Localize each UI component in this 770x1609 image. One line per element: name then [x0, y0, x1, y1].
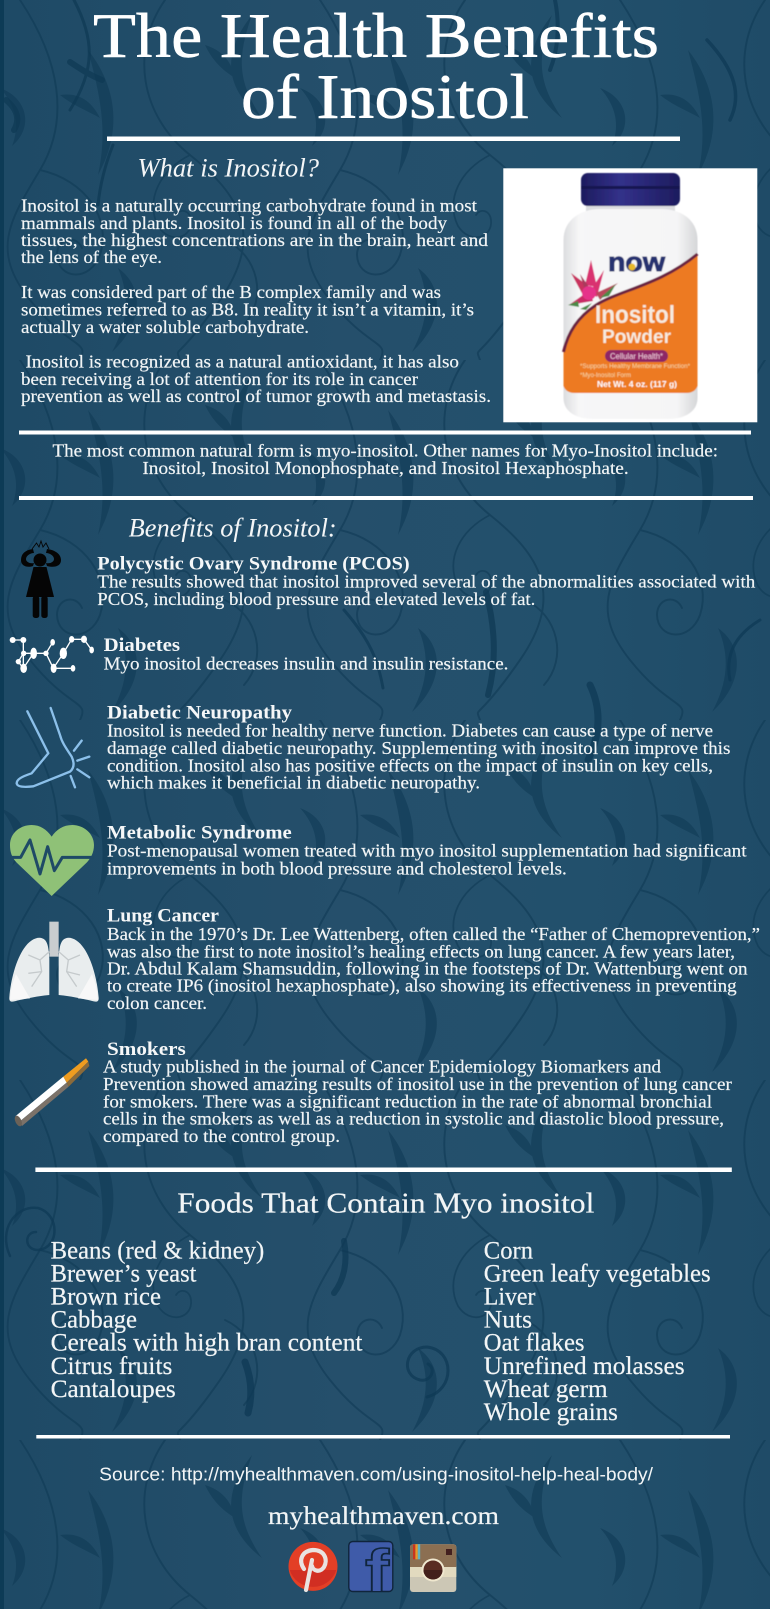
text block: lung cancer: colon cancer.: [107, 993, 207, 1013]
panel: diabetes: [10, 636, 508, 673]
text block: antioxidant: prevention as well as control of tumor growth and metastasis.: [21, 386, 491, 406]
text block: smokers: A study published in the journal of Cancer Epidemiology Biomarkers and: [103, 1057, 661, 1077]
list: foods right column: Oat flakes: [484, 1330, 584, 1357]
text block: diabetic neuropathy: which makes it beneficial in diabetic neuropathy.: [107, 773, 480, 793]
text block: diabetic neuropathy: Inositol is needed for healthy nerve function. Diabetes can cause a type of nerve: [107, 721, 713, 741]
product photo: inositol powder bottle: Net Wt. 4 oz. (117 g): [597, 379, 677, 389]
title: of Inositol: [241, 62, 529, 132]
list: foods left column: [51, 1237, 363, 1403]
text block: pcos: PCOS, including blood pressure and elevated levels of fat.: [97, 589, 535, 609]
product photo: inositol powder bottle: *Supports Healthy Membrane Function*: [580, 363, 690, 370]
title divider: [107, 136, 680, 141]
text block: pcos: The results showed that inositol improved several of the abnormalities associated with: [97, 571, 755, 591]
text block: smokers: cells in the smokers as well as a reduction in systolic and diastolic blood pressure,: [103, 1109, 724, 1129]
heading: smokers: Smokers: [107, 1040, 186, 1060]
text block: smokers: [103, 1057, 732, 1146]
product photo: inositol powder bottle: now: [608, 247, 666, 277]
list: foods right column: Whole grains: [484, 1399, 618, 1426]
text block: b complex: actually a water soluble carbohydrate.: [21, 317, 309, 337]
list: foods right column: Nuts: [484, 1307, 532, 1334]
icon: foot with pain rays: [17, 708, 89, 787]
icon: lungs: [9, 922, 99, 1002]
product photo: inositol powder bottle: Powder: [602, 327, 672, 348]
heading: metabolic syndrome: Metabolic Syndrome: [107, 823, 292, 843]
list: foods right column: Green leafy vegetables: [484, 1261, 711, 1288]
panel: diabetic neuropathy: [17, 703, 730, 793]
text block: natural form: The most common natural form is myo-inositol. Other names for Myo-Inositol include:: [52, 441, 718, 461]
text block: metabolic syndrome: Post-menopausal women treated with myo inositol supplementation had significant: [107, 841, 747, 861]
list: foods right column: Liver: [484, 1284, 536, 1311]
panel: smokers: [13, 1040, 732, 1146]
list: foods left column: Beans (red & kidney): [51, 1237, 264, 1264]
icon: pinterest: [288, 1542, 338, 1591]
text block: antioxidant: [21, 352, 491, 406]
icon: facebook: f: [365, 1538, 390, 1605]
list: foods left column: Brown rice: [51, 1284, 161, 1311]
text block: definition: tissues, the highest concentrations are in the brain, heart and: [21, 230, 488, 250]
list: foods right column: Wheat germ: [484, 1376, 608, 1403]
text block: lung cancer: to create IP6 (inositol hexaphosphate), also showing its effectiveness in preventing: [107, 976, 737, 997]
product photo: inositol powder bottle: Cellular Health*: [610, 352, 663, 361]
text block: antioxidant: been receiving a lot of attention for its role in cancer: [21, 369, 418, 389]
list: foods right column: [484, 1237, 711, 1426]
text block: diabetic neuropathy: condition. Inositol also has positive effects on the impact of insulin on key cells,: [107, 755, 713, 775]
website: myhealthmaven.com: [268, 1503, 500, 1530]
product photo: inositol powder bottle: *Myo-Inositol Form: [580, 372, 631, 379]
text block: diabetes: Myo inositol decreases insulin and insulin resistance.: [104, 653, 508, 673]
text block: lung cancer: Back in the 1970’s Dr. Lee Wattenberg, often called the “Father of Chemoprevention,”: [107, 924, 760, 944]
list: foods left column: Citrus fruits: [51, 1353, 172, 1380]
heading: pcos: Polycystic Ovary Syndrome (PCOS): [97, 554, 410, 574]
divider: [35, 1168, 732, 1172]
panel: pcos: [21, 541, 755, 618]
heading: diabetes: Diabetes: [104, 636, 180, 656]
icon: molecule: [10, 636, 94, 673]
text block: lung cancer: Dr. Abdul Kalam Shamsuddin, following in the footsteps of Dr. Wattenburg went on: [107, 959, 748, 979]
title: [93, 1, 659, 132]
text block: pcos: [97, 571, 755, 609]
heading: diabetic neuropathy: Diabetic Neuropathy: [107, 703, 293, 723]
text block: definition: the lens of the eye.: [21, 247, 162, 267]
list: foods right column: Corn: [484, 1237, 533, 1264]
text block: natural form: Inositol, Inositol Monophosphate, and Inositol Hexaphosphate.: [142, 458, 629, 478]
text block: smokers: compared to the control group.: [103, 1126, 340, 1146]
icon: woman holding head: [21, 541, 61, 618]
list: foods left column: Cabbage: [51, 1307, 137, 1334]
text block: b complex: It was considered part of the B complex family and was: [21, 282, 441, 302]
divider: [36, 1435, 730, 1438]
heading: benefits of inositol: Benefits of Inositol:: [129, 514, 337, 543]
panel: lung cancer: [9, 907, 760, 1013]
list: foods right column: Unrefined molasses: [484, 1353, 685, 1380]
icon: heart with pulse: [10, 825, 94, 896]
divider: [19, 430, 751, 434]
icon: facebook: [348, 1540, 394, 1592]
text block: b complex: sometimes referred to as B8. In reality it isn’t a vitamin, it’s: [21, 300, 474, 320]
product photo: inositol powder bottle: Inositol: [595, 301, 675, 329]
text block: smokers: Prevention showed amazing results of inositol use in the prevention of lung cancer: [103, 1074, 732, 1094]
icon: cigarette: [13, 1058, 89, 1127]
text block: diabetic neuropathy: [107, 721, 730, 793]
product photo: inositol powder bottle: [503, 168, 757, 422]
list: foods left column: Cantaloupes: [51, 1376, 176, 1403]
text block: definition: Inositol is a naturally occurring carbohydrate found in most: [21, 196, 477, 216]
text block: definition: [21, 196, 488, 267]
panel: what is inositol: [21, 154, 491, 406]
text block: b complex: [21, 282, 474, 337]
text block: metabolic syndrome: [107, 841, 747, 878]
text block: smokers: for smokers. There was a significant reduction in the rate of abnormal bronchial: [103, 1091, 712, 1111]
text block: metabolic syndrome: improvements in both blood pressure and cholesterol levels.: [107, 858, 567, 878]
text block: natural form: [52, 441, 718, 478]
divider: [19, 496, 753, 500]
icon: instagram: [410, 1544, 456, 1592]
text block: lung cancer: [107, 924, 760, 1013]
heading: foods: Foods That Contain Myo inositol: [177, 1188, 594, 1220]
title: The Health Benefits: [93, 1, 659, 71]
list: foods left column: Brewer’s yeast: [51, 1261, 197, 1288]
panel: metabolic syndrome: [10, 823, 747, 896]
source: Source: http://myhealthmaven.com/using-inositol-help-heal-body/: [99, 1465, 653, 1485]
text block: antioxidant: Inositol is recognized as a natural antioxidant, it has also: [26, 352, 459, 372]
heading: what is inositol: What is Inositol?: [138, 154, 319, 183]
text block: diabetic neuropathy: damage called diabetic neuropathy. Supplementing with inositol can improve this: [107, 738, 730, 758]
list: foods left column: Cereals with high bran content: [51, 1330, 363, 1357]
text block: definition: mammals and plants. Inositol is found in all of the body: [21, 213, 447, 233]
text block: lung cancer: was also the first to note inositol’s healing effects on lung cancer. A few years later,: [107, 941, 735, 961]
heading: lung cancer: Lung Cancer: [107, 907, 219, 927]
